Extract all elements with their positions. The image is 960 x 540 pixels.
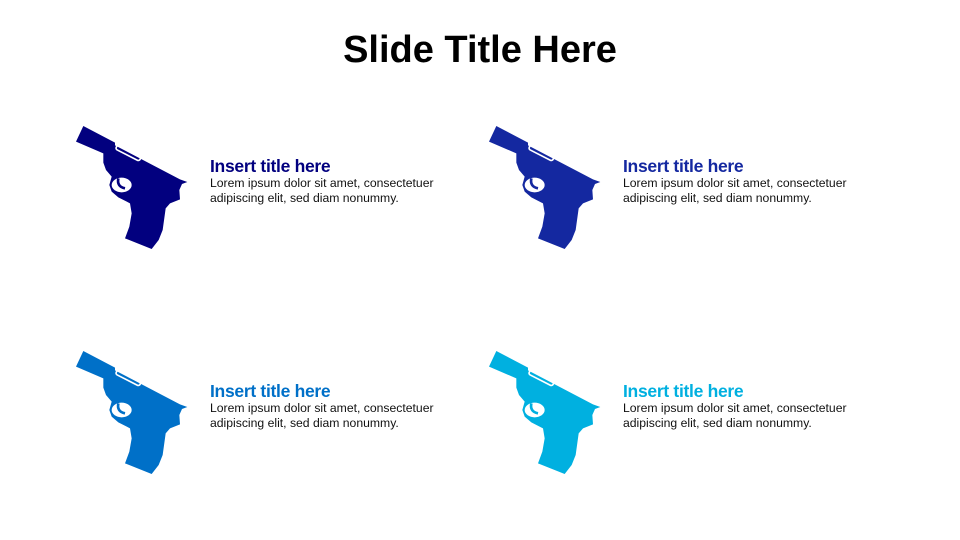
text block: Insert title here bbox=[623, 156, 743, 176]
icon: pistol bbox=[489, 126, 600, 249]
text block: Insert title here bbox=[210, 156, 330, 176]
text block bbox=[210, 381, 434, 430]
text block bbox=[623, 156, 847, 204]
icon: pistol bbox=[76, 126, 188, 249]
text block: Insert title here bbox=[210, 381, 330, 401]
text block bbox=[623, 381, 847, 430]
text block: Lorem ipsum dolor sit amet, consectetuer adipiscing elit, sed diam nonummy. bbox=[210, 176, 434, 204]
item 1 bbox=[76, 126, 434, 249]
icon: pistol bbox=[489, 351, 600, 474]
item 2 bbox=[489, 126, 847, 249]
text block: Lorem ipsum dolor sit amet, consectetuer adipiscing elit, sed diam nonummy. bbox=[210, 401, 434, 430]
text block: Insert title here bbox=[623, 381, 743, 401]
text block: Lorem ipsum dolor sit amet, consectetuer adipiscing elit, sed diam nonummy. bbox=[623, 176, 847, 204]
item 4 bbox=[489, 351, 847, 474]
icon: pistol bbox=[76, 351, 188, 474]
item 3 bbox=[76, 351, 434, 474]
title: Slide Title Here bbox=[343, 29, 617, 71]
text block: Lorem ipsum dolor sit amet, consectetuer adipiscing elit, sed diam nonummy. bbox=[623, 401, 847, 430]
text block bbox=[210, 156, 434, 204]
